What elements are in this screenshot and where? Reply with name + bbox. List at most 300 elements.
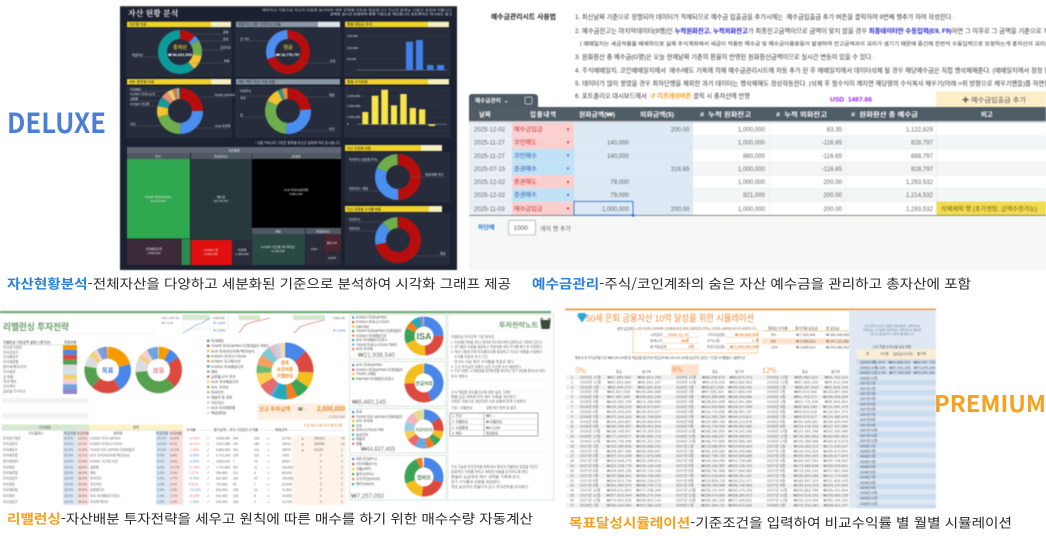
allocation table: 14.23% [189, 436, 200, 440]
card: crypto: 이더리움(ETH) [356, 461, 377, 466]
new investment box: ₩ · [298, 407, 306, 413]
dashboard note: 예탁자산 기준으로 자산의 비중을 분석하며 세부 항목별 차트를 제공합니다 자산군 분류는 사용자 설정에 따릅니다 [262, 7, 452, 12]
bar chart: dividends [347, 34, 447, 70]
input box: 현재나이 [650, 338, 662, 343]
allocation table: ✓ [207, 471, 210, 475]
return rate table: ₩ 293,482,303 [826, 346, 849, 350]
allocation table: 8.1% [170, 442, 177, 446]
allocation table: 4.0% [157, 466, 164, 470]
allocation table: ✓ [207, 448, 210, 452]
target allocation list: 미국채혼합 [3, 359, 19, 364]
allocation table: 2 [341, 476, 343, 480]
goal panel: 2027년 4월 [860, 396, 876, 401]
card: brokerage [352, 409, 438, 453]
note table: ₩4 --- [486, 414, 495, 418]
usage notes: 3. 원화환산 총 예수금(G열)은 오늘 현재날짜 기준의 환율이 반영된 원화환산금액이므로 실시간 변동이 있을 수 있다. [575, 52, 873, 61]
card: brokerage: ₩44,837,465 [361, 446, 395, 453]
allocation table: 42 [254, 476, 258, 480]
panel headers: 월별 수익현황 [347, 79, 369, 84]
input box: 1 개 [752, 338, 759, 343]
panel: asset dashboard [120, 6, 457, 270]
treemap: 주식 [155, 154, 161, 158]
deposit table: 1,000,000 [738, 179, 766, 186]
simulation rows: 2027년 6월 ₩229,699,155 ₩243,734,165 [580, 468, 661, 473]
note text: 월별로 입금액과 매수 내역을 기록해 둔다. [451, 474, 521, 479]
allocation table: 190 [233, 442, 239, 446]
treemap: 미국배당다우 [146, 246, 163, 251]
deposit table: 증권매도 [514, 178, 537, 186]
allocation table: KOSEF 국고채 10년 [90, 458, 118, 464]
simulation rows: 2027년 2월 ₩149,241,526 ₩185,670,692 [767, 448, 848, 453]
simulation rows: 2026년 11월 ₩177,249,877 ₩180,699,713 [580, 434, 661, 438]
allocation table: 1 [254, 482, 256, 486]
simulation rows: 2025년 11월 ₩85,982,614 ₩85,763,414 [767, 374, 848, 380]
allocation table: 5,854,900 [216, 448, 230, 452]
allocation table: ✓ [207, 476, 210, 480]
target allocation list: 미국채권 [3, 369, 15, 374]
goal panel: 나의 월별 순자산별 달성 현황 [873, 344, 911, 349]
bar chart: monthly returns [347, 90, 447, 131]
deposit table: 79,000 [610, 179, 630, 186]
caption: rebalancing: 리밸런싱 -자산배분 투자전략을 세우고 원칙에 따른 매수를 하기 위한 매수수량 자동계산 [7, 508, 533, 528]
deposit table: # 누적 외화잔고 [776, 110, 827, 118]
allocation table: 1,710,800 [216, 466, 230, 470]
donut legend: 예금(현금) [211, 410, 226, 415]
allocation table: 3.8% [170, 460, 177, 464]
goal panel: 5.44% ₩67,031,255 ₩73,675,695 [876, 366, 935, 370]
simulation rows: 2026년 10월 ₩168,765,547 ₩176,254,523 [580, 429, 661, 434]
simulation rows: 7 [571, 405, 573, 409]
bar chart: monthly returns: 1,000,000 [347, 115, 361, 119]
deposit table: 2025-11-03 [474, 206, 505, 213]
note table: ₩ 리밸런싱 [486, 419, 502, 424]
label: DELUXE: DELUXE [7, 102, 106, 142]
new investment box: 2,000,000 [317, 404, 345, 413]
allocation table: 1.0% [157, 482, 164, 486]
note icon [540, 318, 551, 329]
new investment box: 2,000,000 [329, 415, 345, 419]
allocation table: ✓ [207, 494, 210, 498]
simulation rows: 6 [571, 400, 573, 404]
allocation table: 0 [320, 500, 322, 504]
note text: 장기 수익률과 비용을 점검한다. [451, 479, 501, 484]
treemap: CMA [311, 247, 317, 251]
usage title: 예수금관리시트 사용법 [491, 12, 556, 21]
simulation rows: 2026년 4월 ₩93,715,995 ₩95,840,802 [767, 399, 848, 404]
donut legend: ACE 미국30년국채 액티브(H) [211, 348, 255, 353]
usage notes [575, 12, 1046, 100]
mini charts: 2,561.02 [333, 316, 345, 320]
simulation subtitle: 매월 납입액과 시작 자금을 입력하면 수익률에 따라 목표 금액까지 걸리는 기간을 시뮬레이션으로 보여줍니다 [617, 326, 756, 331]
simulation rows: 2027년 6월 ₩206,781,568 ₩227,564,583 [676, 468, 752, 473]
target allocation list: 리밸런싱 기본금액 설정 (=총자산) [3, 340, 51, 344]
allocation table: 1.0% [157, 494, 164, 498]
allocation table: 0 [320, 482, 322, 486]
card: crypto: 도지코인(DOGE) [356, 476, 380, 481]
goal panel: 2028년 11월 [860, 495, 877, 500]
goal panel: 2027년 8월 [860, 417, 876, 422]
goal panel: 수익률 [880, 351, 889, 356]
allocation table: ▲ [301, 448, 304, 452]
simulation rows: 2026년 3월 ₩101,695,605 ₩105,064,564 [676, 394, 752, 399]
simulation rows: 2027년 11월 ₩238,474,986 ₩268,289,872 [676, 493, 752, 498]
donut: cash vs invest [270, 34, 306, 70]
note table: 점검완료 [486, 430, 498, 436]
card: brokerage: TIGER 미국 S&P500 타겟데일리 [356, 414, 402, 419]
allocation table: 미국채혼합 [3, 470, 18, 475]
allocation table: 미국채 액티브 [90, 499, 109, 504]
simulation rows: 2026년 5월 ₩102,383,010 ₩118,873,697 [580, 404, 661, 409]
donut centre: holdings [277, 360, 293, 380]
allocation table: 추가 매수수량 [323, 422, 343, 428]
note table: ₩4 2,000 [486, 426, 500, 430]
allocation table: 21.46% [189, 466, 200, 470]
allocation table: ↪ [267, 436, 270, 440]
card: ISA: TIGER 미국나스닥100 커버드 [356, 342, 398, 347]
treemap: 예수금 [217, 194, 225, 199]
allocation table: 4,835,952 [216, 436, 230, 440]
donut centre: cash value: ₩ 18,778,757 [276, 53, 300, 57]
goal panel: 월 [866, 351, 869, 356]
simulation rows: 2027년 10월 ₩259,011,804 ₩277,248,284 [580, 488, 661, 493]
allocation table: 종목명 [113, 430, 123, 436]
rate headers [575, 364, 840, 375]
note text: 5. 주요 이벤트 시 변동성을 감안해 분할 매수하고 장기 보유를 원칙으로 한다 [451, 368, 546, 373]
allocation table: 23,500 [282, 482, 292, 486]
donut legend: KOSEF 국고채10년 [211, 359, 241, 364]
donut labels: row two: 주식 [329, 126, 335, 131]
donut legend: 금현물 ETF 투자 [211, 374, 236, 379]
treemap: 6,250,400 [204, 252, 218, 256]
bar chart: monthly returns: 2,000,000 [347, 94, 361, 98]
donut legend: 미국리츠 [211, 390, 225, 395]
allocation table: 15.0% [64, 471, 73, 475]
goal panel: 납입금(수수료) [893, 351, 913, 356]
donut legend: 코인자산 [211, 400, 225, 405]
return rate table: ₩ 3,685,014 [796, 346, 815, 350]
allocation table: 매매내역 [275, 427, 287, 432]
treemap: KOSEF 국고채 3년 액티브 [261, 244, 295, 249]
deposit table: 1,122,829 [906, 126, 934, 134]
allocation table: 36.5% [78, 476, 87, 480]
allocation table: 20.0% [157, 436, 166, 440]
allocation table: ✓ [207, 500, 210, 504]
simulation rows: 2025년 12월 ₩90,476,190 ₩93,552,593 [676, 379, 752, 384]
allocation table: 954,800 [216, 471, 228, 475]
donut legend: ACE 미국채혼합 [211, 405, 236, 410]
simulation rows: 16 [570, 449, 574, 453]
simulation rows: 27 [570, 503, 574, 507]
simulation rows: 2027년 8월 ₩219,899,723 ₩243,211,477 [676, 478, 752, 483]
note text: 1. 자산배분 전략을 세우고 원칙에 따라 매수하며 감정적으로 거래하지 않는다. [451, 340, 543, 344]
deposit table: 688,797 [911, 153, 934, 160]
allocation table: 15.0% [64, 488, 73, 492]
donut centre: cash value [276, 44, 300, 57]
allocation table: 2 [341, 471, 343, 475]
return rate table: 12% [771, 346, 778, 350]
treemap: 달러 RP [327, 240, 337, 245]
deposit table: 200.00 [671, 126, 690, 134]
allocation table: 8.91% [189, 482, 198, 486]
target allocation list: 원자재/헤지/리츠 [3, 364, 27, 369]
allocation table: 미국채권 [3, 482, 15, 486]
simulation rows: 2025년 12월 ₩89,693,560 ₩90,561,347 [580, 379, 661, 384]
allocation table: 8.8% [170, 454, 177, 458]
simulation rows [566, 374, 849, 508]
allocation table: 510,400 [216, 494, 228, 498]
allocation table: 목표비중 [64, 430, 76, 436]
deposit table: 828,797 [911, 166, 934, 173]
simulation rows: 2027년 1월 ₩173,089,574 ₩210,644,840 [676, 443, 752, 448]
allocation table: ↪ [267, 488, 270, 492]
card: pension: KODEX 미국S&P500 타겟데일리 [356, 367, 403, 372]
allocation table: 441 [233, 448, 239, 452]
mini charts [161, 315, 346, 333]
allocation table: 10.0% [157, 448, 166, 452]
allocation table: 10.6% [170, 436, 179, 440]
allocation table: 10.1% [170, 466, 179, 470]
deposit table: 2025-12-02 [474, 192, 506, 199]
allocation table: 예비 [90, 470, 96, 475]
allocation table: 307 [233, 466, 239, 470]
simulation rows: 2026년 5월 ₩95,665,269 ₩121,091,375 [767, 404, 848, 409]
note text: 수익률 목표와 투자 기간 [454, 354, 488, 359]
deposit table: ▾ [567, 140, 570, 146]
panel: rebalancing sheet [0, 311, 554, 505]
deposit table: 316.65 [671, 166, 690, 173]
goal panel: 2027년 1월 [860, 380, 876, 386]
donut legend: 테슬라 등 성장 [211, 395, 233, 400]
donut centre: holdings: 리밸런싱 [277, 372, 293, 380]
simulation rows: 9 [571, 415, 573, 419]
allocation table: 36.5% [78, 471, 87, 475]
goal panel: 2027년 3월 [860, 391, 876, 396]
panel headers: 세부 섹터 자산 구성 비중 [238, 79, 276, 84]
deposit table: 1,000,000 [738, 126, 766, 134]
deposit table: 200.00 [671, 206, 690, 213]
panel headers: 세부 종목별 비중 [129, 79, 155, 84]
donut labels: row two: 미국배당 [130, 86, 141, 92]
deposit table: 2025-11-27 [474, 140, 505, 147]
simulation rows: 5 [571, 395, 573, 399]
target allocation list: 미국배당주 [3, 354, 19, 359]
allocation table: 22.2% [78, 454, 87, 458]
card: ISA: KODEX 미국S&P500 [356, 315, 387, 320]
simulation rows: 2027년 4월 ₩159,547,094 ₩200,746,062 [767, 458, 848, 463]
return rate table: ₩ 7,400,495 [796, 333, 815, 337]
allocation table: ✓ [207, 436, 210, 440]
usage notes: 4. 주식매매일지, 코인매매일지에서 매수/매도 기록에 의해 예수금관리시트에 자동 추가 된 후 매매일지에서 데이터삭제 될 경우 해당예수금은 직접 행삭제해준다. (매매일지에서 정정 입 [575, 66, 1046, 74]
allocation table: 2 [341, 460, 343, 464]
card: crypto: 에이다(ADA) [356, 481, 374, 486]
simulation rows: 2026년 1월 ₩92,449,370 ₩95,381,834 [580, 384, 661, 389]
allocation table: 2 [341, 466, 343, 470]
allocation table: 미국채혼합 [3, 487, 18, 492]
mini charts: USD 1467.66 [161, 316, 179, 320]
allocation table: 101 [254, 448, 260, 452]
allocation table: 180 [254, 442, 260, 446]
goal panel: 기대하는 수익률을 입력하면 시뮬레이션 결과와 [863, 327, 922, 332]
allocation table: 11 [254, 466, 258, 470]
usage notes: 2. 예수금잔고는 마지막데이터(9행)인 누적원화잔고, 누적외화잔고가 최종잔고금액이므로 금액이 맞지 않을 경우 최종데이터만 수동입력(E9, F9)하면 그 이후로 그 금액을 기준으로 계산 [575, 26, 1046, 35]
allocation table: 투자 기간 [229, 427, 243, 432]
allocation table: 7 [233, 460, 235, 464]
allocation table: 415,900 [216, 500, 228, 504]
simulation rows: 2027년 12월 ₩210,124,906 ₩250,764,320 [767, 498, 848, 502]
card: brokerage: SOL 미국채 [356, 418, 372, 423]
treemap [127, 147, 341, 265]
deposit table: 140,000 [607, 140, 630, 147]
donut centre: target: 목표 [102, 366, 114, 374]
goal panel: 2027년 9월 [860, 422, 876, 427]
allocation table: 19 [341, 436, 345, 440]
allocation table: 미국채권 [3, 493, 15, 498]
rate headers: 12% [762, 366, 777, 375]
allocation table: 254 [254, 436, 260, 440]
donut labels: 부동 [224, 59, 230, 63]
goal panel: 2028년 5월 [860, 464, 876, 469]
dashboard title: 자산 현황 분석 [128, 8, 178, 18]
allocation table: 미국채혼합 [3, 452, 18, 458]
simulation rows: 2026년 7월 ₩98,575,027 ₩124,380,479 [767, 414, 848, 419]
usage notes: ( 매매일지는 세금적용을 배제하므로 실제 주식계좌에서 세금이 적용된 예수금 및 예수금이용료등이 발생하여 잔고금액과의 괴리가 생기기 때문에 중간에 한번씩 수동입력으로 보정하는게 총자산의 괴리를 [580, 40, 1046, 48]
goal panel: 2028년 1월 [860, 443, 876, 448]
sheet tab: 예수금관리 ⌄ [475, 96, 509, 104]
account cards [350, 314, 446, 500]
donut labels: 연금 [223, 36, 229, 41]
allocation table: 2 [341, 494, 343, 498]
deposit table: 828,797 [911, 140, 934, 147]
note table: 4. 메모 [452, 430, 462, 436]
target allocation list: 목표비중 [64, 340, 76, 344]
target allocation list: 미국장기채권 [3, 344, 22, 350]
new investment box [257, 404, 346, 420]
deposit table: ▾ [567, 166, 570, 172]
simulation rows: 2027년 7월 ₩184,804,056 ₩214,770,632 [767, 473, 848, 478]
donut labels: row two: KODEX 미국나스닥 [130, 91, 155, 96]
allocation table: 70 [254, 460, 258, 464]
simulation rows: 2027년 4월 ₩194,160,490 ₩211,728,080 [676, 458, 752, 463]
card: ISA: ₩21,936,540 [358, 352, 395, 359]
allocation table: 자산배분 [39, 424, 51, 430]
input box [633, 330, 759, 353]
simulation rows: 2025년 11월 ₩88,208,876 ₩85,873,413 [676, 374, 752, 380]
card: ISA [352, 315, 438, 359]
allocation table: 36.5% [78, 466, 87, 470]
goal panel: 2026년 9월 [860, 360, 876, 364]
deposit table: 코인매수 [514, 152, 537, 160]
deposit table: 79,000 [610, 192, 630, 199]
treemap: 채권 [275, 228, 281, 234]
deposit table: 1,214,532 [906, 192, 934, 199]
simulation rows: 2026년 12월 ₩168,747,690 ₩200,085,183 [676, 438, 752, 444]
allocation table: 264 [233, 436, 239, 440]
allocation table: 2 [341, 500, 343, 504]
return rate table [762, 326, 849, 350]
allocation table: 2.0% [170, 488, 177, 492]
simulation rows: 11 [570, 425, 574, 429]
goal panel: 2028년 12월 [860, 501, 877, 506]
simulation rows: 20 [570, 469, 574, 473]
card: brokerage: 삼성전자 [356, 432, 368, 437]
allocation table: 15.0% [64, 494, 73, 498]
deposit table: 입출내역 [530, 110, 556, 118]
deposit table: 1,293,532 [906, 179, 934, 186]
allocation table: 105 [233, 494, 239, 498]
input box: ₩ 1,000,000,000 [730, 345, 759, 349]
panel: asset class donuts right: 미국주식 (성장형 주식) [349, 156, 378, 162]
simulation rows: 2026년 1월 ₩93,617,235 ₩100,228,751 [676, 384, 752, 389]
allocation table: 36.5% [78, 494, 87, 498]
allocation table: 16.11% [189, 442, 200, 446]
donut: sector weights [270, 94, 306, 128]
allocation table: KODEX 미국 S&P500 [90, 436, 121, 440]
panel headers: 위험자산 대비 안전자산 비율 [238, 22, 281, 27]
deposit table: ▾ [567, 206, 570, 212]
simulation rows: 2027년 8월 ₩189,897,319 ₩221,826,439 [767, 478, 848, 483]
goal panel: 2027년 10월 [860, 428, 877, 432]
treemap: KODEX 금 [204, 248, 218, 252]
allocation table: -1.45% [189, 448, 199, 452]
allocation table: 162 [233, 476, 239, 480]
goal panel: 2028년 4월 [860, 459, 876, 464]
donut labels: 코 기타 [240, 36, 249, 41]
deposit table: 예수금입금 [514, 205, 543, 213]
panel bodies [127, 29, 450, 137]
goal panel: 2028년 10월 [860, 490, 877, 495]
allocation table: 1.6% [170, 500, 177, 504]
allocation table: ✓ [207, 454, 210, 458]
simulation rows: 2026년 2월 ₩89,519,586 ₩103,897,606 [767, 389, 848, 394]
simulation rows: 2027년 2월 ₩181,029,282 ₩230,080,689 [676, 448, 752, 453]
simulation rows: 2027년 2월 ₩199,697,396 ₩208,606,657 [580, 448, 661, 453]
simulation rows: 2027년 1월 ₩144,269,212 ₩171,030,247 [767, 443, 848, 448]
allocation table: ↪ [267, 454, 270, 458]
simulation rows: 2026년 8월 ₩100,826,551 ₩156,839,999 [767, 419, 848, 424]
deposit table: 원화금액(₩) [579, 110, 615, 118]
note text: 리밸런싱 투자전략 기본 원칙은 [451, 334, 494, 339]
allocation table: ▲ [301, 436, 304, 440]
allocation table: 3,610,356 [216, 442, 230, 446]
allocation table [2, 422, 346, 505]
allocation table: 미국성장주 [3, 499, 18, 504]
allocation table: -5.02% [189, 454, 199, 458]
add rows control [478, 220, 571, 235]
allocation table: 114 [254, 454, 259, 458]
deposit table: 2025-11-27 [474, 153, 505, 160]
treemap: 현금성자산 [316, 228, 330, 234]
deposit table: -116.65 [822, 166, 843, 173]
donut: target [90, 353, 125, 387]
allocation table: ✓ [207, 442, 210, 446]
card: ISA: ISA [416, 332, 432, 342]
allocation table: ✓ [207, 482, 210, 486]
allocation table: 2.1% [170, 494, 177, 498]
allocation table: 105 [233, 488, 239, 492]
donut labels: 현금자산 [132, 52, 143, 57]
donut centre: current: 보유 [153, 366, 165, 374]
card: pension: TIGER 고배당 [356, 371, 376, 376]
deposit table: -116.65 [822, 140, 843, 147]
donut: total assets [162, 34, 198, 70]
note text: 투자 계획서 [451, 374, 468, 378]
treemap: 5,120,000 [271, 249, 285, 253]
allocation table: 2 [254, 500, 256, 504]
allocation table: 미국채권 [3, 464, 15, 470]
simulation rows: 2026년 9월 ₩141,776,924 ₩155,562,560 [676, 424, 752, 429]
deposit table: 2025-12-02 [474, 126, 506, 134]
note text: 수익 적립형 포트폴리오에 대한 설계 그래프 [451, 390, 511, 394]
